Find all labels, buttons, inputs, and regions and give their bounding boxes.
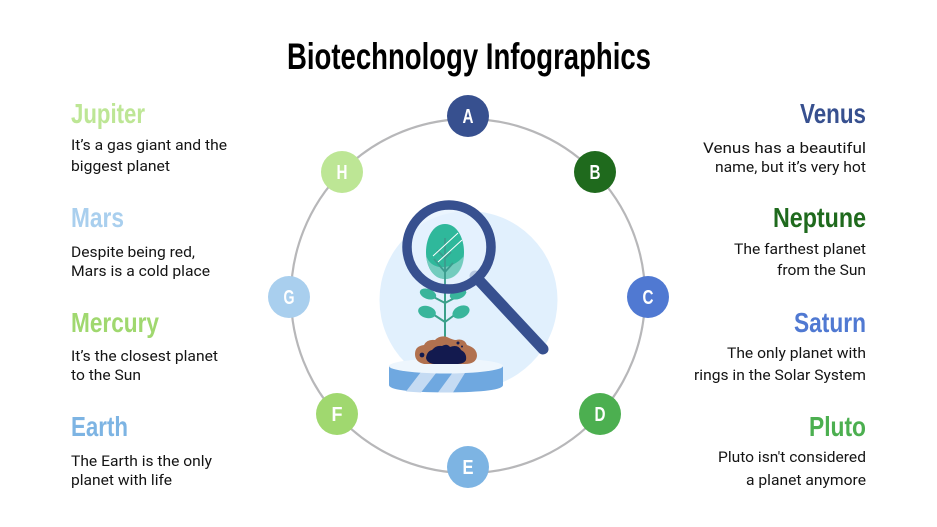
node H: H (336, 162, 348, 184)
Earth block (71, 411, 212, 489)
node E: E (462, 457, 474, 479)
title: Biotechnology Infographics (287, 36, 651, 77)
Mars block: Mars is a cold place (71, 263, 210, 280)
Neptune block (734, 202, 866, 279)
petri dish (389, 358, 503, 392)
node B: B (590, 162, 600, 184)
node F (316, 393, 358, 435)
Venus block: Venus (800, 98, 866, 129)
Saturn block (694, 307, 866, 384)
background disc (380, 211, 558, 389)
Mercury block: It’s the closest planet (71, 348, 218, 365)
Mercury block: Mercury (71, 307, 159, 338)
magnifying glass (407, 205, 543, 349)
node G: G (284, 287, 294, 309)
Pluto block: Pluto (809, 411, 866, 442)
central illustration: plant under magnifying glass (380, 205, 558, 392)
node A (447, 95, 489, 137)
node C: C (642, 287, 654, 309)
Jupiter block (71, 98, 227, 175)
node H (321, 151, 363, 193)
Earth block: The Earth is the only (71, 453, 212, 470)
Venus block (703, 98, 866, 176)
Neptune block: from the Sun (777, 262, 866, 279)
node B (574, 151, 616, 193)
node F: F (332, 404, 342, 426)
node G (268, 276, 310, 318)
node E (447, 446, 489, 488)
Earth block: planet with life (71, 472, 172, 489)
Saturn block: Saturn (794, 307, 866, 338)
Pluto block: Pluto isn't considered (718, 449, 866, 466)
Saturn block: The only planet with (727, 345, 866, 362)
Mars block: Despite being red, (71, 244, 195, 261)
soil mound (415, 336, 477, 364)
node D: D (594, 404, 606, 426)
ring connecting the letter nodes (291, 119, 645, 473)
Mercury block: to the Sun (71, 367, 141, 384)
Mars block (71, 202, 210, 280)
Venus block: name, but it’s very hot (715, 159, 866, 176)
Neptune block: Neptune (773, 202, 866, 233)
Pluto block: a planet anymore (746, 472, 866, 489)
Jupiter block: biggest planet (71, 158, 170, 175)
Pluto block (718, 411, 866, 489)
Jupiter block: Jupiter (71, 98, 145, 129)
Saturn block: rings in the Solar System (694, 367, 866, 384)
node D (579, 393, 621, 435)
Neptune block: The farthest planet (734, 241, 866, 258)
Venus block: Venus has a beautiful (703, 140, 866, 157)
node C (627, 276, 669, 318)
Jupiter block: It’s a gas giant and the (71, 137, 227, 154)
plant stem and leaves (417, 285, 472, 340)
Mercury block (71, 307, 218, 384)
Mars block: Mars (71, 202, 124, 233)
node A: A (462, 106, 474, 128)
Earth block: Earth (71, 411, 128, 442)
